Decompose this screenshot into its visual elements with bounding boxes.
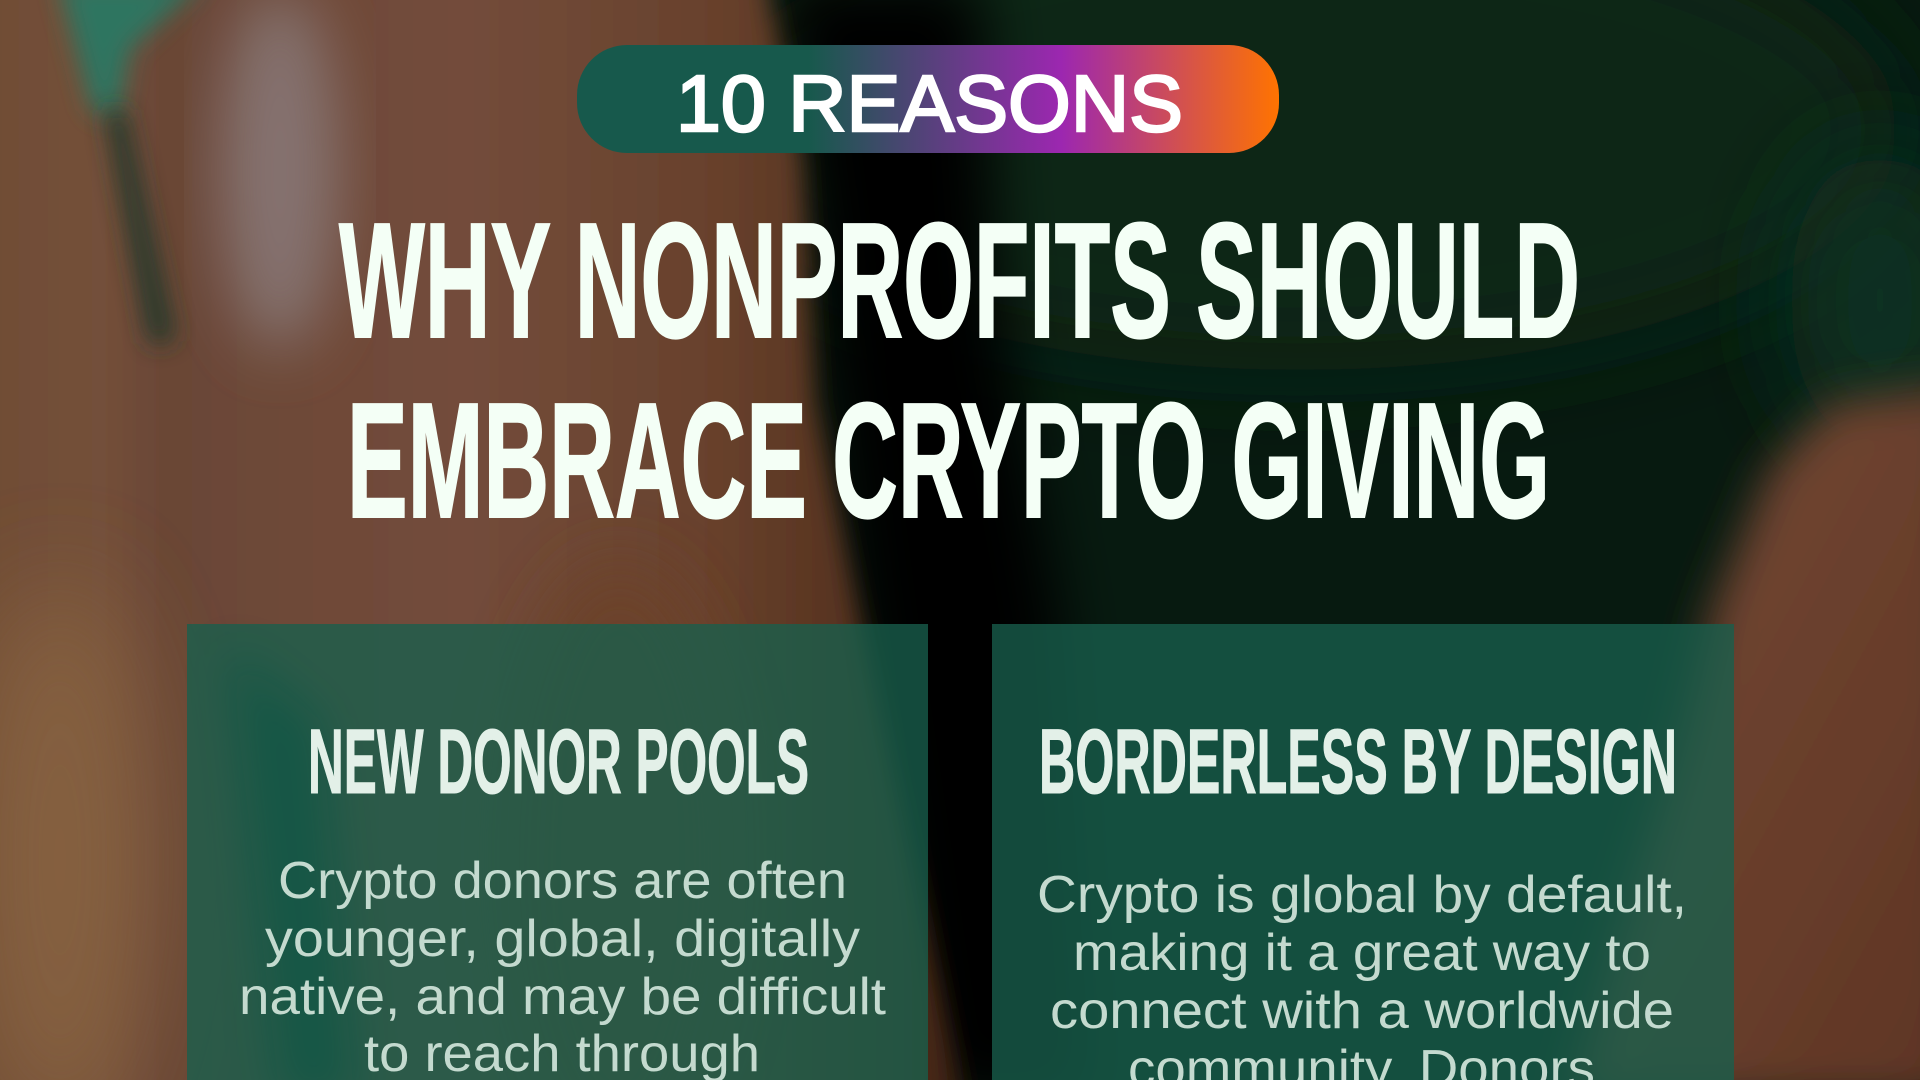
- text block: new donor pools description: Crypto donors are often: [278, 852, 847, 910]
- title: [338, 222, 1577, 520]
- text block: new donor pools description: native, and may be difficult: [239, 968, 887, 1026]
- text block: new donor pools description: [239, 852, 887, 1080]
- badge: 10 reasons: 10 REASONS: [676, 59, 1183, 148]
- heading: new donor pools: NEW DONOR POOLS: [308, 711, 809, 813]
- text block: borderless by design description: making it a great way to: [1073, 924, 1651, 982]
- text block: new donor pools description: younger, global, digitally: [265, 910, 860, 968]
- text block: borderless by design description: connect with a worldwide: [1050, 982, 1674, 1040]
- text block: borderless by design description: [1037, 866, 1687, 1080]
- text block: borderless by design description: Crypto is global by default,: [1037, 866, 1687, 924]
- panel: new donor pools: [187, 624, 928, 1080]
- panel: borderless by design: [992, 624, 1734, 1080]
- badge: 10 reasons: [577, 45, 1279, 153]
